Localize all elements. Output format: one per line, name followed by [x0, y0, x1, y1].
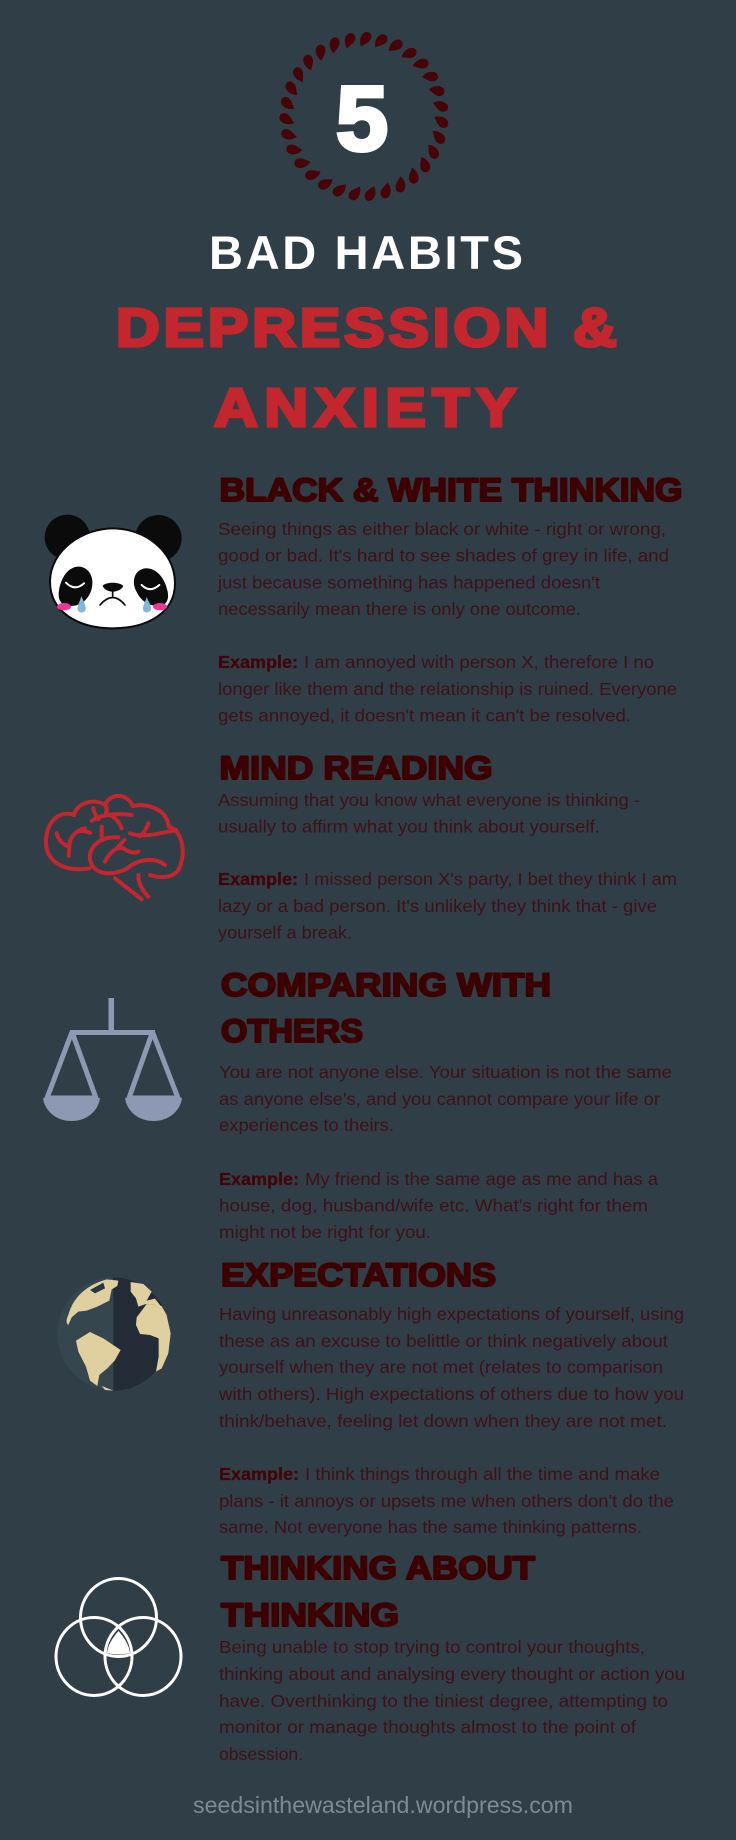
heading: COMPARING WITH — [221, 967, 551, 1003]
example: My friend is the same age as me and has a — [305, 1169, 658, 1189]
panel: mind reading — [46, 750, 677, 943]
title: depression and anxiety — [116, 298, 617, 438]
icon: crying panda — [45, 515, 182, 628]
description: have. Overthinking to the tiniest degree, attempting to — [219, 1691, 668, 1711]
description: thinking about and analysing every thought or action you — [219, 1664, 685, 1684]
example: I am annoyed with person X, therefore I no — [304, 652, 654, 672]
description: good or bad. It's hard to see shades of grey in life, and — [218, 546, 669, 566]
example: might not be right for you. — [219, 1222, 431, 1242]
panel: thinking about thinking — [56, 1550, 685, 1764]
badge: number 5 in dotted ring — [279, 32, 449, 201]
example — [219, 1464, 674, 1537]
icon: overlapping circles — [56, 1578, 181, 1696]
example: gets annoyed, it doesn't mean it can't be resolved. — [218, 706, 631, 726]
description: Being unable to stop trying to control your thoughts, — [219, 1637, 645, 1657]
title: depression and anxiety: DEPRESSION & — [116, 298, 617, 358]
heading: OTHERS — [221, 1013, 363, 1049]
description: usually to affirm what you think about yourself. — [218, 817, 600, 837]
title: depression and anxiety: ANXIETY — [214, 378, 516, 438]
number 5: 5 — [336, 68, 388, 170]
heading: MIND READING — [220, 750, 492, 786]
example: Example: — [218, 869, 298, 889]
example: lazy or a bad person. It's unlikely they think that - give — [218, 896, 657, 916]
footer: website: seedsinthewasteland.wordpress.com — [193, 1792, 573, 1818]
example: longer like them and the relationship is ruined. Everyone — [218, 679, 677, 699]
panel: black and white thinking — [45, 472, 682, 726]
icon: brain — [46, 796, 183, 899]
heading — [221, 967, 551, 1049]
description: yourself when they are not met (relates to comparison — [219, 1357, 663, 1377]
description: Having unreasonably high expectations of yourself, using — [219, 1304, 684, 1324]
example: I think things through all the time and make — [305, 1464, 660, 1484]
description: monitor or manage thoughts almost to the point of — [219, 1717, 636, 1737]
example: same. Not everyone has the same thinking patterns. — [219, 1517, 642, 1537]
example: Example: — [219, 1464, 299, 1484]
example — [219, 1169, 658, 1242]
description: as anyone else's, and you cannot compare your life or — [219, 1089, 660, 1109]
description: You are not anyone else. Your situation is not the same — [219, 1062, 672, 1082]
heading: THINKING ABOUT — [221, 1550, 536, 1586]
description: just because something has happened doesn't — [217, 572, 600, 592]
description: think/behave, feeling let down when they are not met. — [219, 1411, 667, 1431]
description — [218, 1304, 684, 1431]
description — [218, 790, 640, 837]
example: yourself a break. — [218, 923, 352, 943]
heading: EXPECTATIONS — [221, 1257, 496, 1293]
heading: BLACK & WHITE THINKING — [220, 472, 682, 508]
icon: balance scales — [43, 998, 182, 1121]
description: obsession. — [219, 1744, 303, 1764]
description: experiences to theirs. — [219, 1115, 394, 1135]
example: Example: — [219, 1169, 299, 1189]
example: I missed person X's party, I bet they think I am — [304, 869, 677, 889]
panel: expectations — [57, 1257, 684, 1537]
description: Assuming that you know what everyone is thinking - — [218, 790, 640, 810]
example: Example: — [218, 652, 298, 672]
description: necessarily mean there is only one outcome. — [218, 599, 581, 619]
example: house, dog, husband/wife etc. What's right for them — [219, 1196, 648, 1216]
description — [219, 1637, 685, 1764]
example — [218, 652, 677, 726]
title: bad habits: BAD HABITS — [209, 226, 523, 279]
description — [219, 1062, 672, 1135]
description: Seeing things as either black or white - right or wrong, — [218, 519, 666, 539]
example — [218, 869, 677, 943]
heading: THINKING — [221, 1597, 399, 1633]
ring of drops — [279, 32, 449, 201]
example: plans - it annoys or upsets me when others don't do the — [219, 1491, 674, 1511]
description — [217, 519, 669, 619]
heading — [221, 1550, 536, 1633]
description: with others). High expectations of others due to how you — [218, 1384, 684, 1404]
panel: comparing with others — [43, 967, 672, 1242]
icon: globe — [57, 1277, 171, 1391]
description: these as an excuse to belittle or think negatively about — [219, 1331, 668, 1351]
